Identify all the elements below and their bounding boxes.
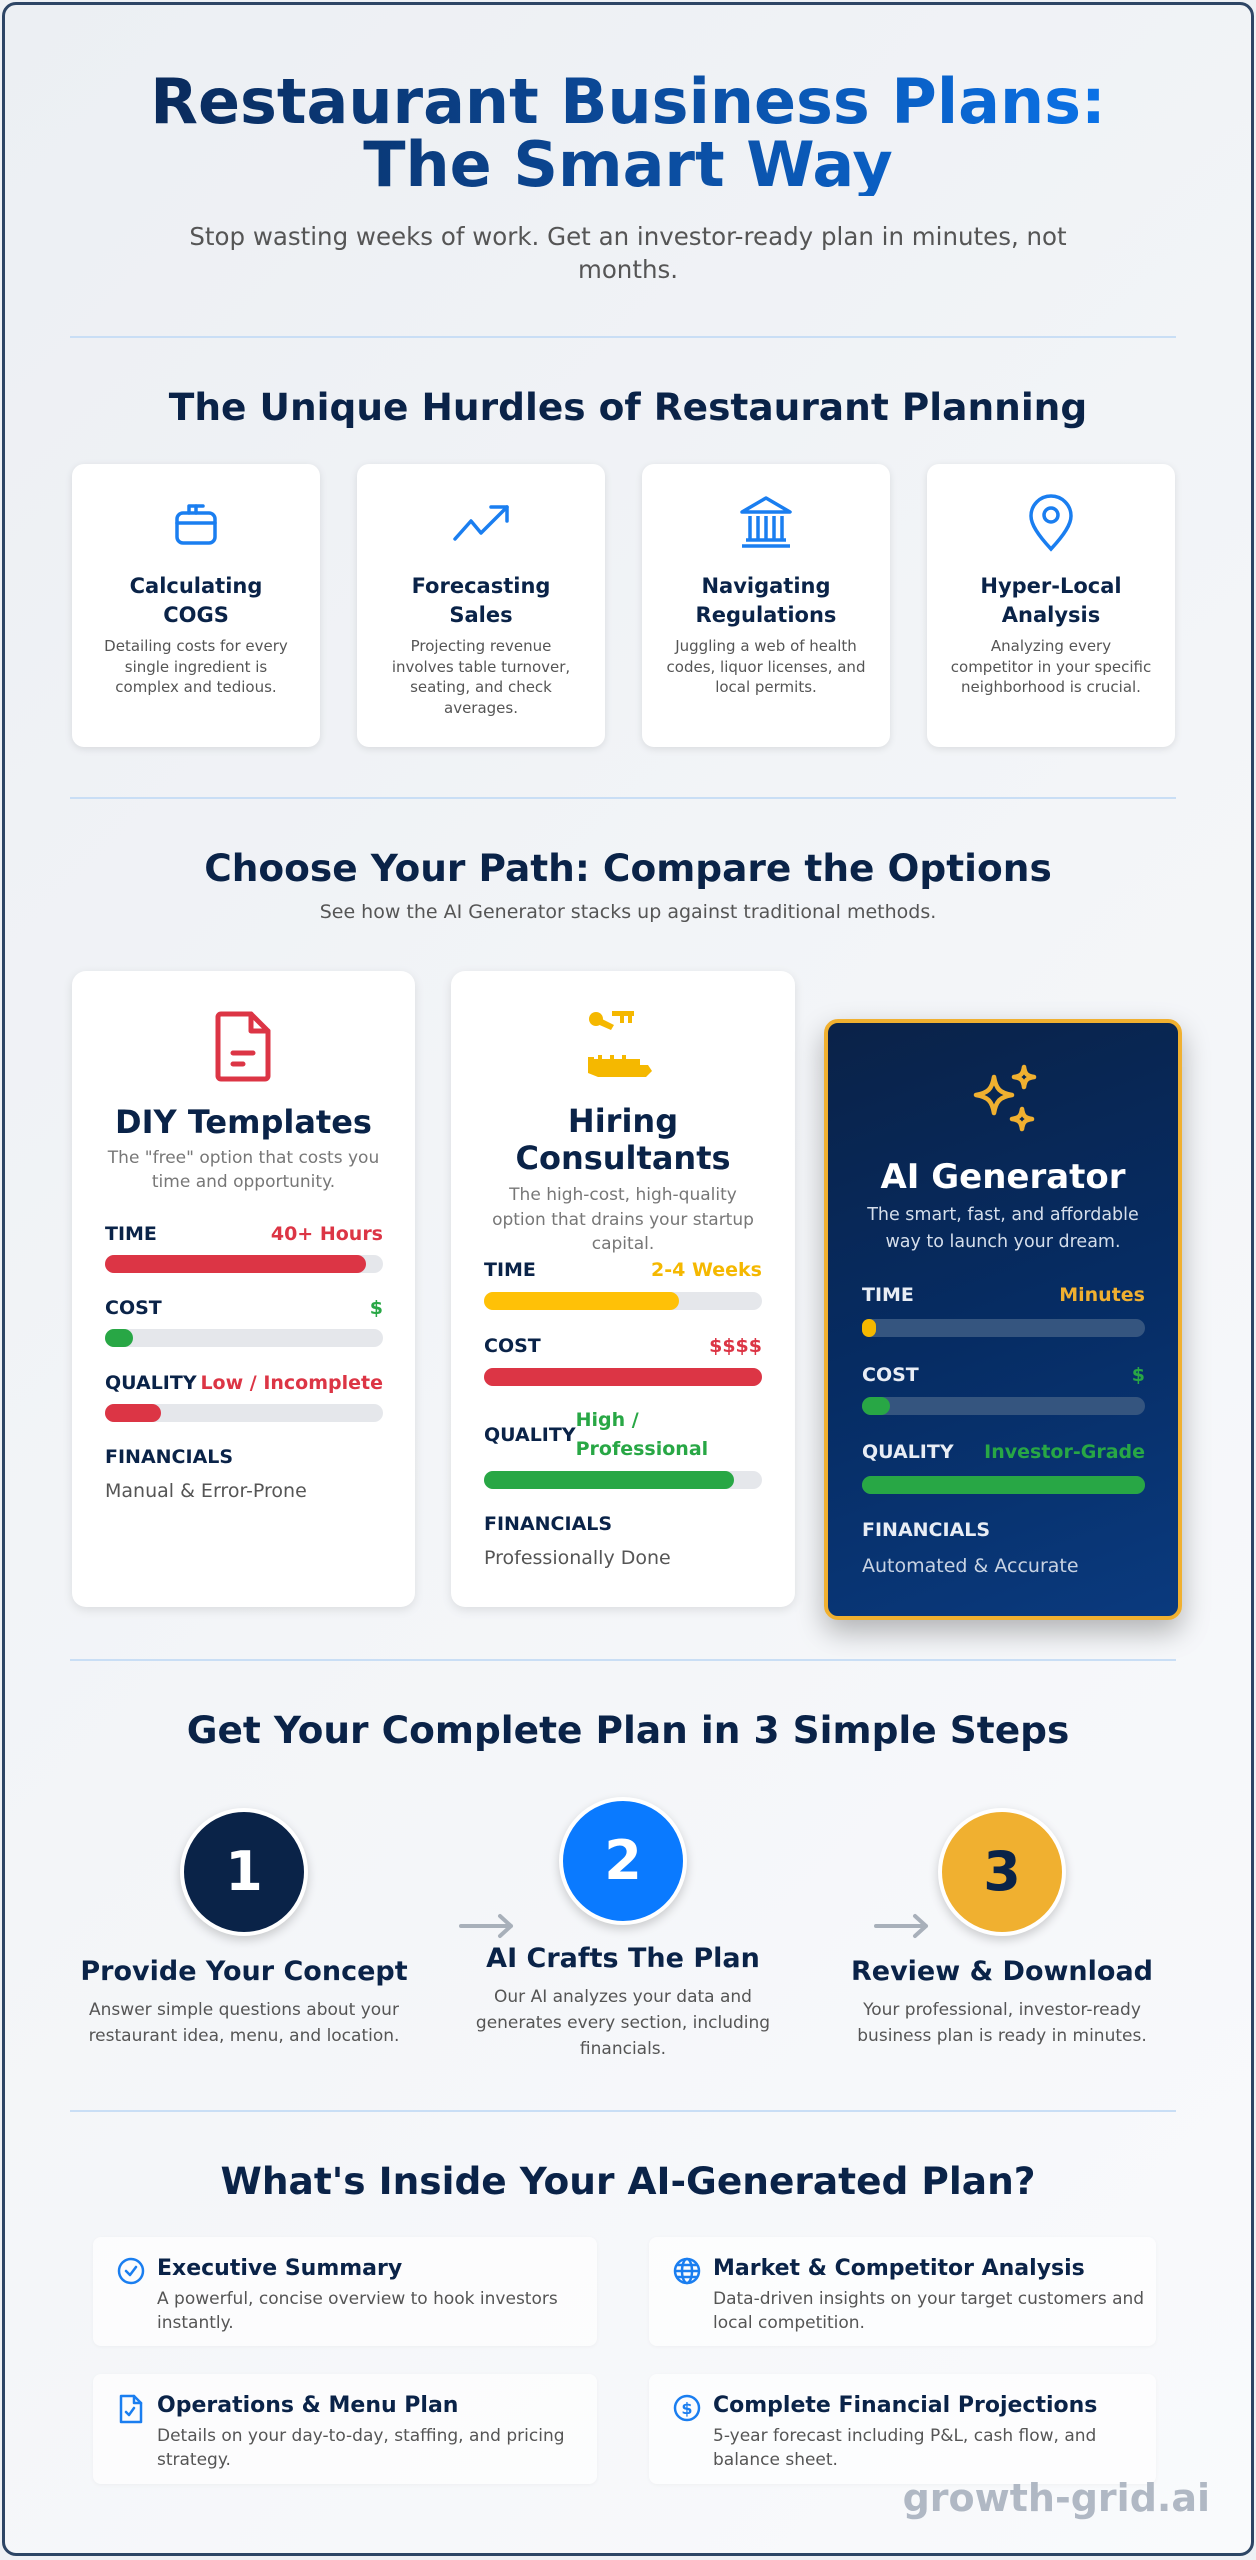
- description: The high-cost, high-quality option that drains your startup capital.: [492, 1185, 754, 1254]
- metric: time: [105, 1223, 383, 1245]
- icon: circle 1: 1: [225, 1840, 263, 1903]
- card: forecasting: Projecting revenue: [411, 637, 551, 655]
- card: COGS: COGS: [163, 603, 229, 627]
- step 1: Answer simple questions about your restaurant idea, menu, and location.: [89, 2000, 399, 2046]
- metric: cost: [105, 1297, 383, 1319]
- title: Hiring: [568, 1102, 678, 1140]
- card: forecasting: seating, and check: [410, 678, 552, 696]
- heading: hurdles: The Unique Hurdles of Restaurant Planning: [169, 385, 1087, 429]
- card: forecasting: Forecasting: [412, 574, 550, 598]
- feature: financial projections: 5-year forecast including P&L, cash flow, and balance sheet.: [713, 2426, 1096, 2470]
- metric: time: 40+ Hours: [271, 1223, 383, 1245]
- icon: circle 2: 2: [604, 1829, 642, 1892]
- step 3: Review & Download: [851, 1956, 1153, 1987]
- icon: circle 3: 3: [983, 1840, 1021, 1903]
- title: The Smart Way: [363, 128, 893, 201]
- card: hyper-local: Analysis: [1002, 603, 1100, 627]
- card: regulations: Juggling a web of health: [675, 637, 857, 655]
- title: AI Generator: [880, 1157, 1126, 1197]
- description: The smart, fast, and affordable way to launch your dream.: [867, 1205, 1139, 1252]
- icon: globe: [674, 2258, 700, 2284]
- step 2: [476, 1797, 770, 2059]
- metric: time: TIME: [105, 1223, 157, 1245]
- heading: steps: Get Your Complete Plan in 3 Simple Steps: [187, 1708, 1069, 1752]
- card: regulations: local permits.: [715, 678, 817, 696]
- metric: financials: FINANCIALS: [484, 1513, 612, 1535]
- metric: quality: QUALITY: [105, 1372, 197, 1394]
- metric: cost: COST: [862, 1364, 919, 1386]
- feature: operations: [93, 2374, 597, 2484]
- feature: market analysis: [649, 2237, 1156, 2346]
- feature: executive summary: A powerful, concise overview to hook investors instantly.: [157, 2289, 558, 2333]
- feature: market analysis: Market & Competitor Analysis: [713, 2256, 1085, 2281]
- card: forecasting: Sales: [449, 603, 513, 627]
- feature: executive summary: [93, 2237, 597, 2346]
- metric: cost: $: [1132, 1364, 1145, 1386]
- metric: quality: [862, 1441, 1145, 1463]
- card: regulations: Regulations: [696, 603, 836, 627]
- icon: sparkles: [974, 1064, 1036, 1132]
- icon: bank: [740, 496, 792, 548]
- feature: financial projections: [649, 2374, 1156, 2484]
- panel: DIY templates: [72, 971, 415, 1607]
- title: Restaurant Business Plans:: [150, 65, 1106, 138]
- step 2: Our AI analyzes your data and generates every section, including financials.: [476, 1987, 770, 2059]
- metric: quality: QUALITY: [484, 1424, 576, 1446]
- metric: quality: Professional: [576, 1438, 708, 1460]
- metric: quality: Low / Incomplete: [200, 1372, 383, 1394]
- icon: trend up: [453, 505, 509, 541]
- metric: quality: High /: [576, 1409, 639, 1431]
- metric: cost: [484, 1335, 762, 1357]
- metric: time: TIME: [862, 1284, 914, 1306]
- icon: dollar circle: [674, 2394, 700, 2422]
- card: hyper-local: Hyper-Local: [980, 574, 1122, 598]
- card: hyper-local: Analyzing every: [991, 637, 1111, 655]
- card: regulations: codes, liquor licenses, and: [667, 658, 865, 676]
- card: forecasting: [357, 464, 605, 747]
- panel: AI generator: Automated & Accurate: [862, 1555, 1079, 1577]
- icon: jar: [175, 504, 217, 545]
- icon: circle 3: [938, 1808, 1066, 1936]
- icon: check circle: [118, 2258, 144, 2284]
- step 1: [80, 1808, 408, 2046]
- description: The "free" option that costs you time and opportunity.: [108, 1148, 379, 1192]
- metric: time: [484, 1259, 762, 1281]
- card: COGS: [72, 464, 320, 747]
- metric: cost: COST: [105, 1297, 162, 1319]
- metric: quality: [484, 1409, 708, 1460]
- icon: circle 1: [180, 1808, 308, 1936]
- metric: cost: $: [370, 1297, 383, 1319]
- icon: handshake: [588, 1011, 652, 1077]
- icon: dollar circle: $: [681, 2399, 693, 2418]
- card: COGS: single ingredient is: [125, 658, 267, 676]
- metric: time: Minutes: [1059, 1284, 1145, 1306]
- icon: circle 2: [559, 1797, 687, 1925]
- panel: hiring consultants: [451, 971, 795, 1607]
- feature: executive summary: Executive Summary: [157, 2256, 402, 2281]
- metric: time: [862, 1284, 1145, 1306]
- card: hyper-local: [927, 464, 1175, 747]
- panel: hiring consultants: Professionally Done: [484, 1547, 671, 1569]
- title: [515, 1102, 731, 1177]
- card: forecasting: involves table turnover,: [392, 658, 570, 676]
- metric: financials: FINANCIALS: [862, 1519, 990, 1541]
- feature: market analysis: Data-driven insights on your target customers and local competition.: [713, 2289, 1144, 2333]
- heading: inside: What's Inside Your AI-Generated Plan?: [220, 2159, 1036, 2203]
- metric: cost: $$$$: [709, 1335, 762, 1357]
- metric: cost: [862, 1364, 1145, 1386]
- feature: operations: Details on your day-to-day, staffing, and pricing strategy.: [157, 2426, 565, 2470]
- arrow 2: [874, 1914, 928, 1938]
- step 3: [851, 1808, 1153, 2046]
- panel: hurdle cards: [70, 464, 1176, 750]
- feature: financial projections: Complete Financial Projections: [713, 2393, 1097, 2418]
- card: COGS: complex and tedious.: [115, 678, 277, 696]
- step 3: Your professional, investor-ready business plan is ready in minutes.: [857, 2000, 1147, 2046]
- metric: quality: QUALITY: [862, 1441, 954, 1463]
- subheading: compare: See how the AI Generator stacks up against traditional methods.: [320, 901, 936, 923]
- panel: AI generator: [824, 1019, 1182, 1620]
- card: regulations: Navigating: [701, 574, 831, 598]
- card: hyper-local: competitor in your specific: [951, 658, 1151, 676]
- title: [150, 65, 1106, 201]
- title: DIY Templates: [115, 1103, 372, 1141]
- metric: quality: [105, 1372, 383, 1394]
- feature: operations: Operations & Menu Plan: [157, 2393, 458, 2418]
- panel: DIY templates: Manual & Error-Prone: [105, 1480, 307, 1502]
- icon: map pin: [1029, 494, 1073, 552]
- subtitle: Stop wasting weeks of work. Get an investor-ready plan in minutes, not months.: [189, 222, 1067, 284]
- icon: document: [216, 1012, 270, 1082]
- metric: cost: COST: [484, 1335, 541, 1357]
- card: regulations: [642, 464, 890, 747]
- card: COGS: Detailing costs for every: [104, 637, 288, 655]
- metric: quality: Investor-Grade: [984, 1441, 1145, 1463]
- metric: financials: FINANCIALS: [105, 1446, 233, 1468]
- arrow 1: [459, 1914, 513, 1938]
- icon: file check: [120, 2394, 142, 2424]
- card: COGS: Calculating: [130, 574, 262, 598]
- card: hyper-local: neighborhood is crucial.: [961, 678, 1141, 696]
- metric: time: 2-4 Weeks: [651, 1259, 762, 1281]
- step 1: Provide Your Concept: [80, 1956, 408, 1987]
- metric: time: TIME: [484, 1259, 536, 1281]
- step 2: AI Crafts The Plan: [486, 1943, 760, 1974]
- heading: compare: Choose Your Path: Compare the Options: [204, 846, 1052, 890]
- card: forecasting: averages.: [444, 698, 518, 716]
- title: Consultants: [515, 1139, 731, 1177]
- watermark: growth-grid.ai: [903, 2476, 1210, 2520]
